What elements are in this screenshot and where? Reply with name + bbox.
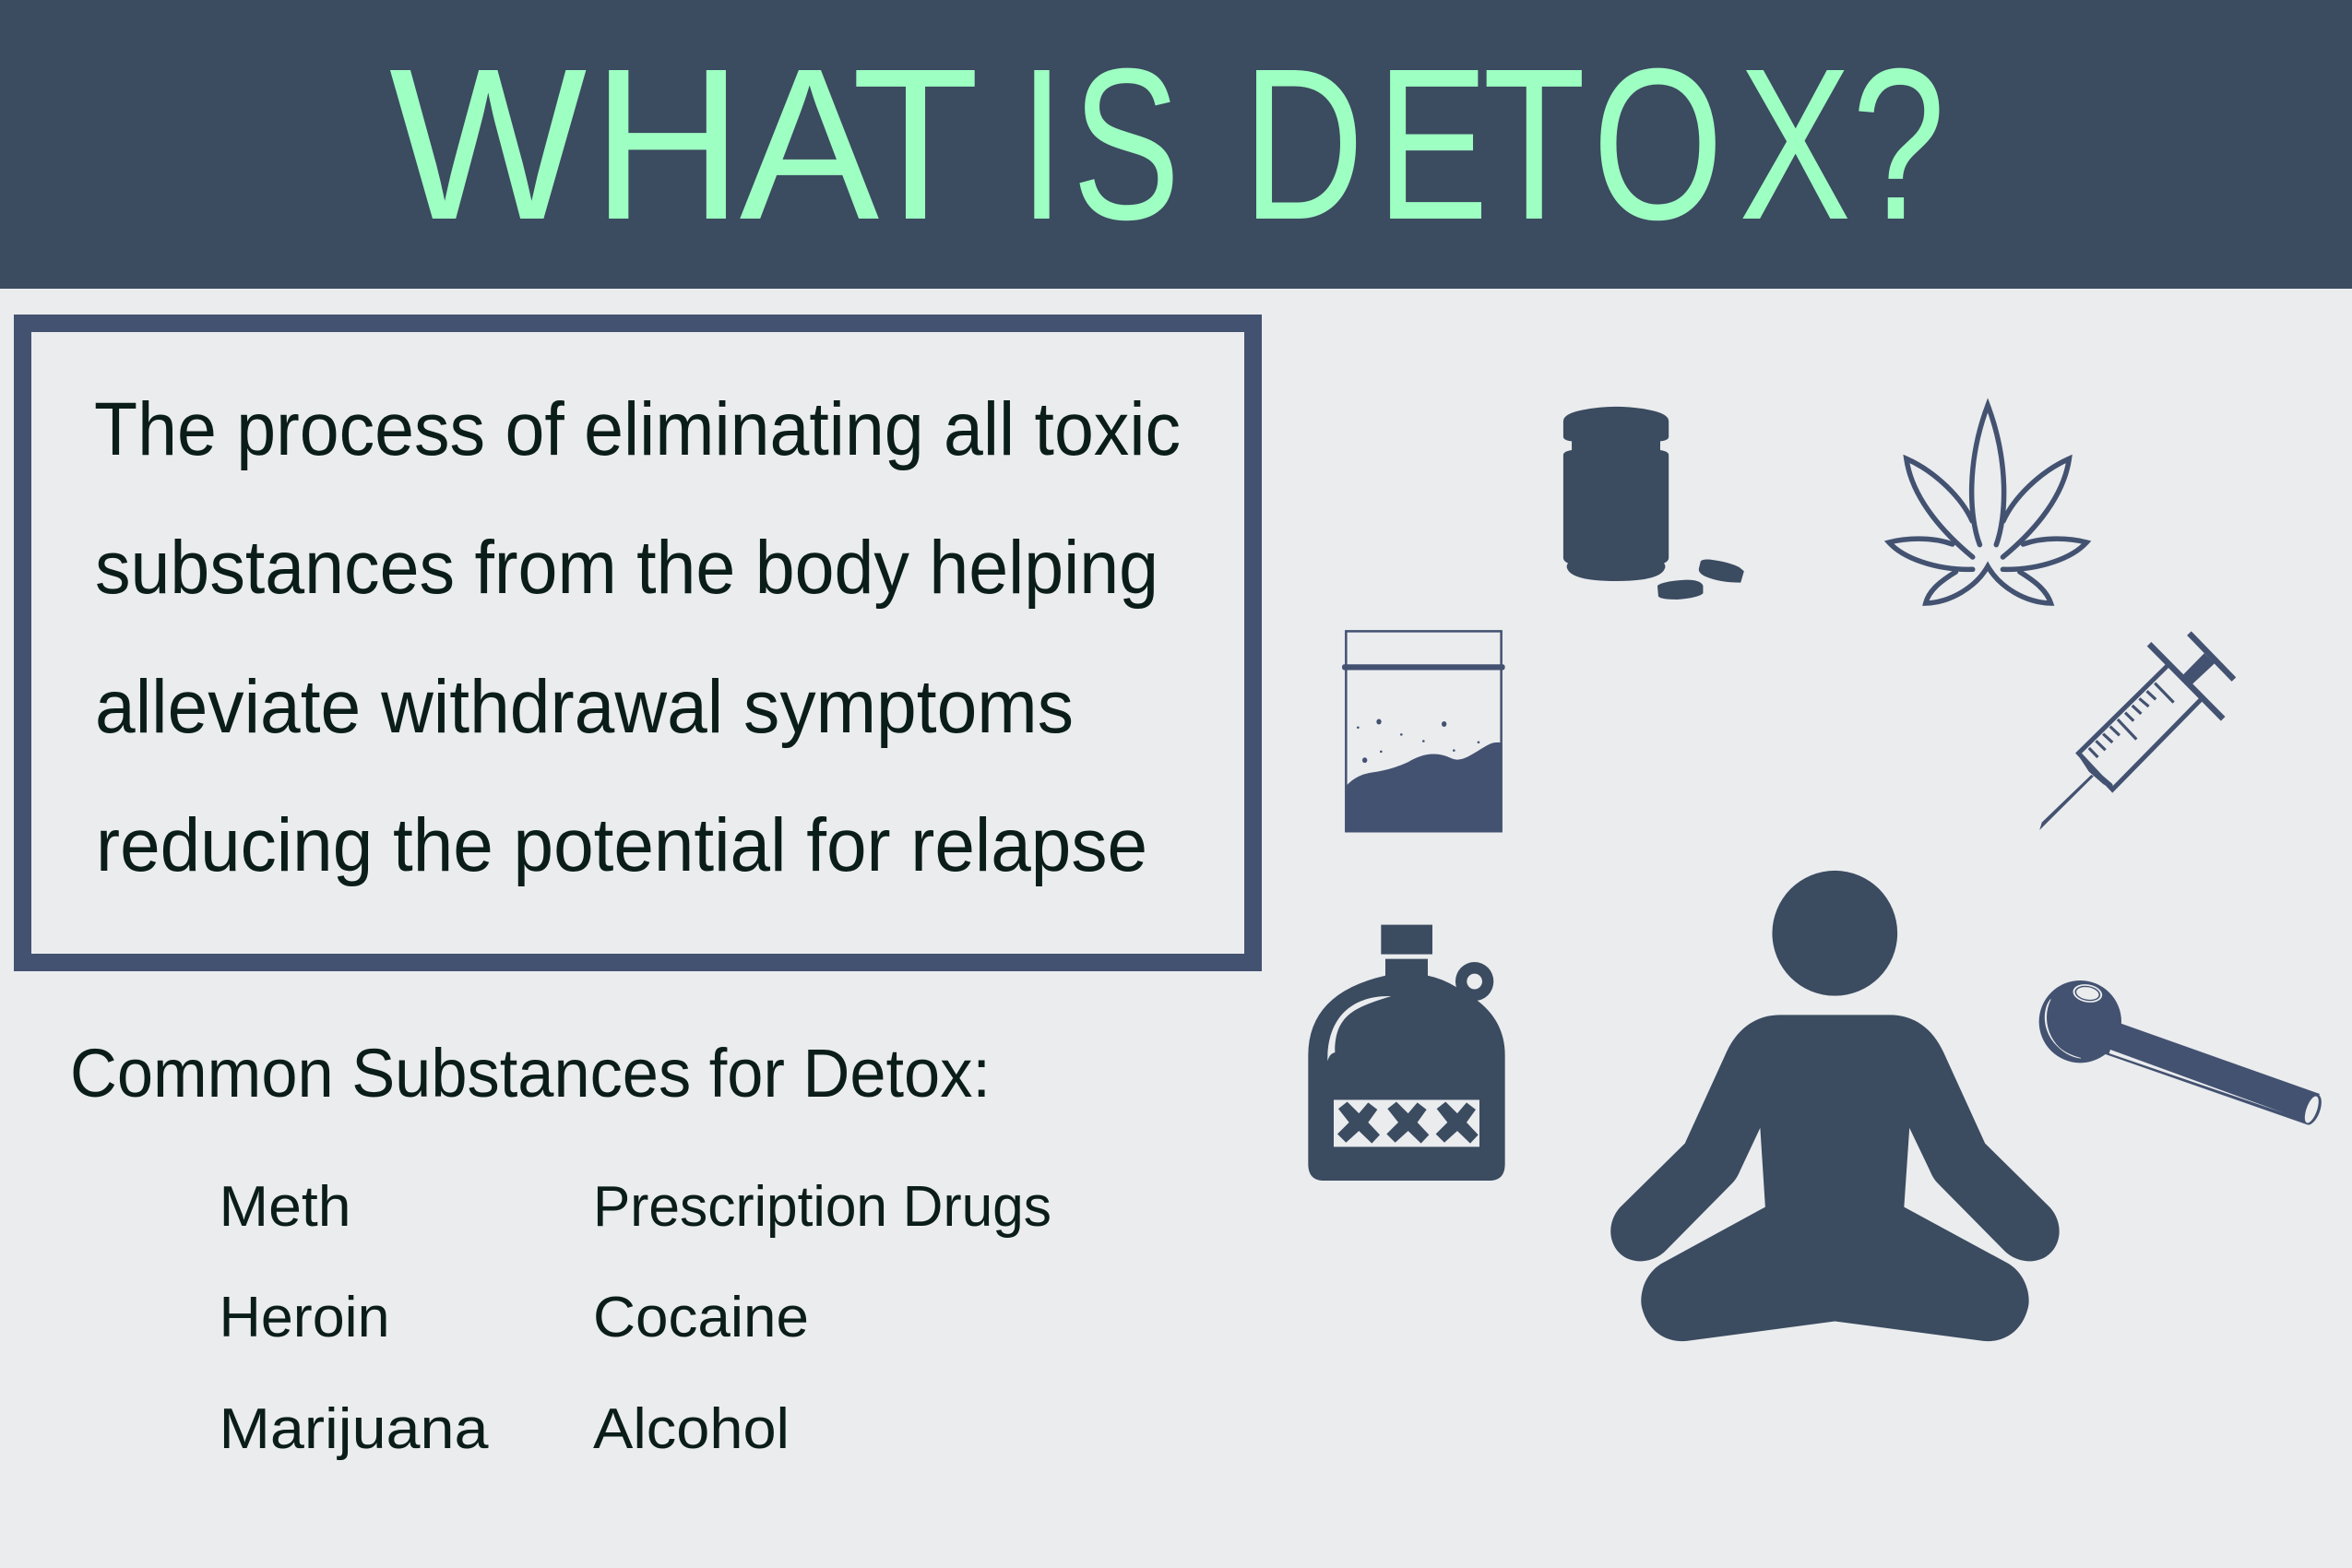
- list: substances: Heroin: [220, 1286, 389, 1349]
- title: WHAT: [389, 23, 980, 265]
- title: DETOX?: [1242, 24, 1945, 265]
- heading: common substances: Common Substances for Detox:: [70, 1035, 991, 1111]
- text block: definition: [94, 387, 1181, 887]
- text block: definition: alleviate withdrawal symptoms: [95, 665, 1074, 749]
- list: substances: Marijuana: [220, 1397, 489, 1461]
- icon: pill bottle: [1563, 407, 1744, 600]
- title: [389, 23, 1945, 265]
- icon: meditating person: [1610, 871, 2060, 1341]
- text block: definition: substances from the body helping: [95, 526, 1158, 610]
- list: substances: Alcohol: [593, 1397, 790, 1461]
- list: substances: Meth: [220, 1175, 350, 1239]
- header banner: [0, 0, 2352, 289]
- list: substances: Prescription Drugs: [593, 1175, 1051, 1239]
- text block: definition: The process of eliminating all toxic: [94, 387, 1181, 471]
- icon: cannabis leaf: [1889, 405, 2086, 603]
- text block: definition: reducing the potential for relapse: [96, 803, 1147, 887]
- icon: glass pipe: [2039, 980, 2325, 1127]
- person body: [1610, 1015, 2060, 1341]
- list: substances: [220, 1175, 1051, 1461]
- list: substances: Cocaine: [593, 1286, 809, 1349]
- title: IS: [1019, 23, 1181, 265]
- panel: definition: [22, 323, 1253, 963]
- icon: powder bag: [1342, 631, 1505, 832]
- person head: [1772, 871, 1897, 996]
- icon: liquor jug: [1308, 925, 1505, 1181]
- icon: syringe: [2039, 634, 2234, 830]
